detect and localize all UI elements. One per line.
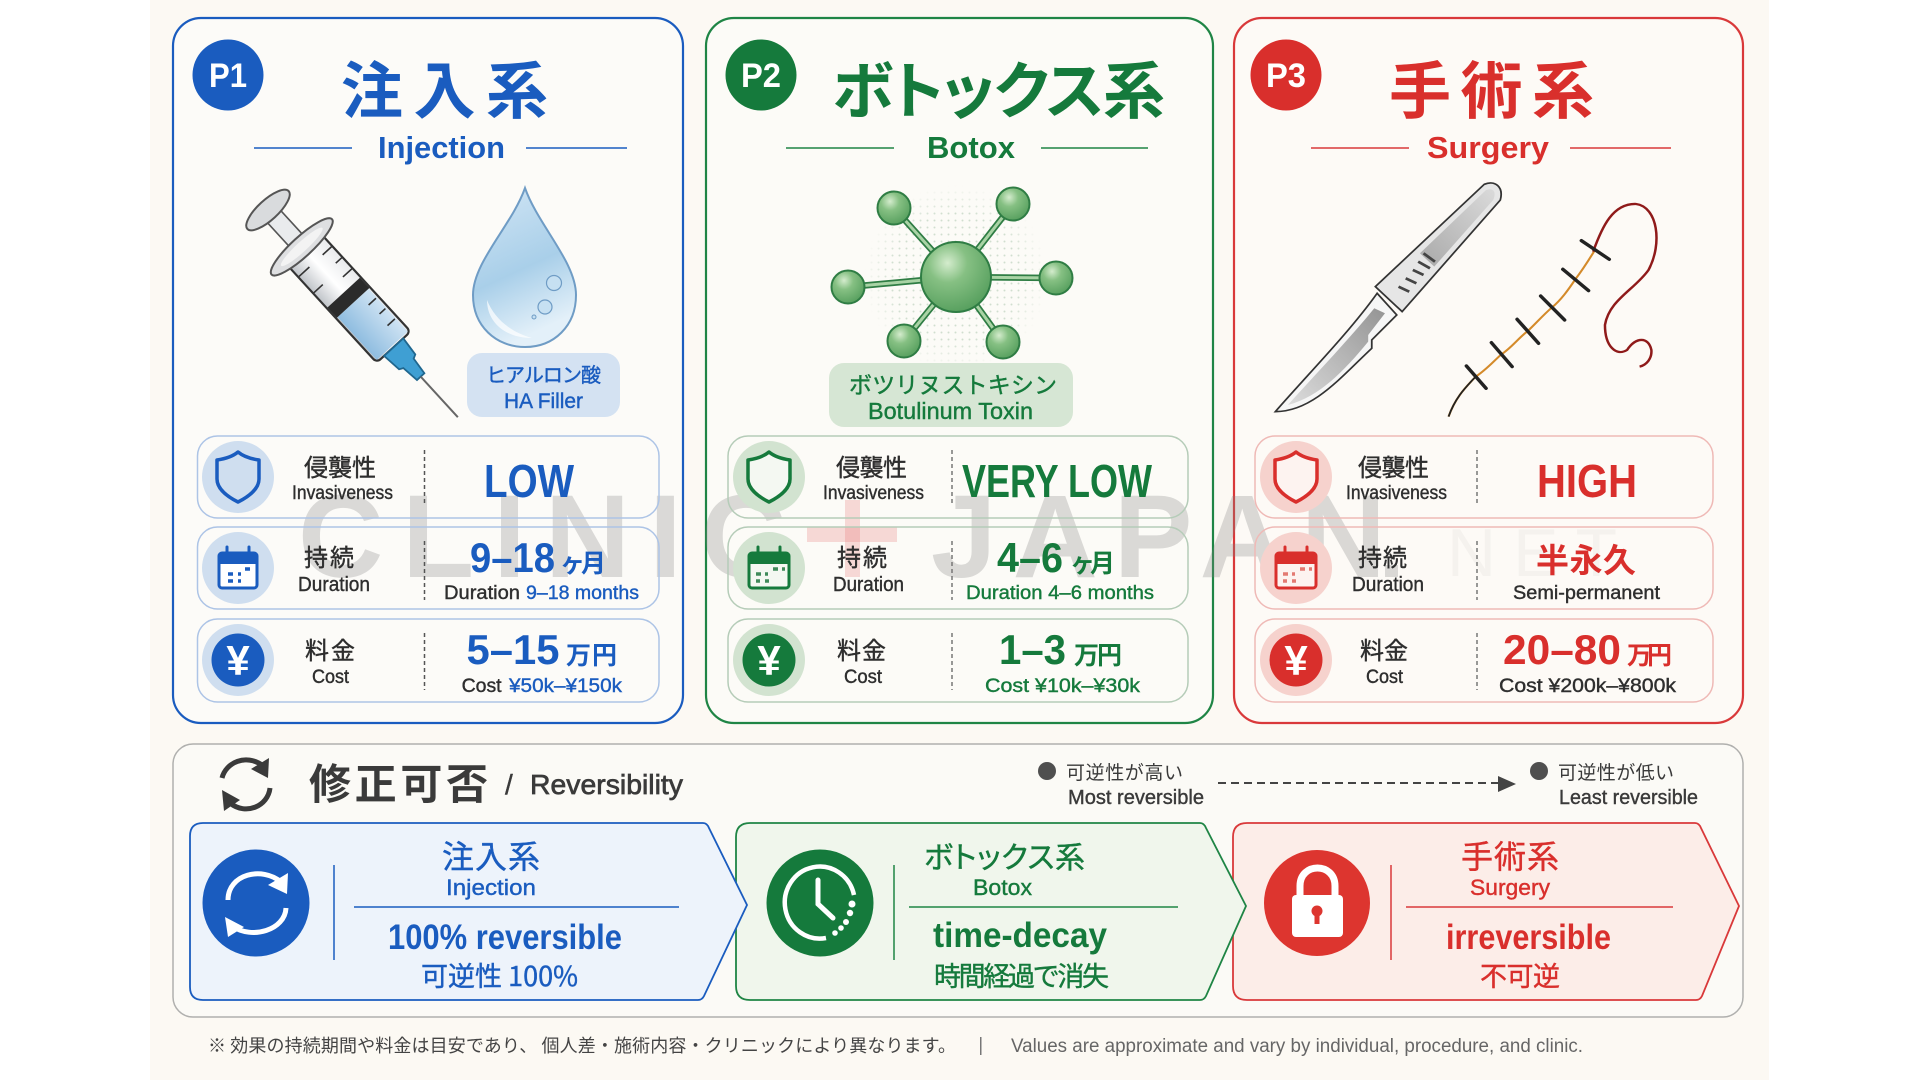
row: P3 duration: 半永久 bbox=[1536, 534, 1636, 582]
row: P2 cost: 1–3 bbox=[999, 626, 1066, 673]
row: P1 cost bbox=[198, 619, 659, 702]
chevron: surgery irreversible: 不可逆 bbox=[1480, 955, 1560, 994]
row: P3 cost: Cost bbox=[1366, 667, 1404, 688]
row: P1 duration: 持続 bbox=[304, 538, 354, 573]
row: P1 duration: 9–18 months bbox=[526, 583, 639, 604]
row: P3 cost: 20–80 bbox=[1503, 626, 1621, 673]
label: HA Filler: HA Filler bbox=[504, 390, 583, 413]
heading: 修正可否 / Reversibility: / bbox=[505, 769, 513, 800]
row: P1 cost: ¥50k–¥150k bbox=[508, 676, 623, 697]
chevron: surgery irreversible: Surgery bbox=[1470, 875, 1550, 900]
row: P1 invasiveness bbox=[198, 436, 659, 518]
chevron: injection reversible bbox=[190, 823, 747, 1000]
legend: least reversible: 可逆性が低い bbox=[1558, 758, 1674, 785]
row: P3 cost bbox=[1255, 619, 1713, 702]
chevron: botox time-decay: Botox bbox=[973, 875, 1032, 900]
watermark: CLINIC bbox=[298, 471, 786, 603]
row: P2 cost bbox=[728, 619, 1188, 702]
label: HA Filler: ヒアルロン酸 bbox=[486, 359, 601, 388]
row: P2 invasiveness: VERY LOW bbox=[962, 455, 1152, 507]
row: P1 cost: Cost bbox=[462, 676, 502, 697]
row: P3 cost: 万円 bbox=[1627, 636, 1672, 672]
row: P3 cost: 料金 bbox=[1360, 631, 1408, 666]
row: P2 cost: Cost ¥10k–¥30k bbox=[985, 676, 1141, 697]
icon: reversibility cycle bbox=[222, 758, 270, 811]
subheading: Botox: Botox bbox=[927, 130, 1016, 165]
icon: suture bbox=[1449, 204, 1656, 417]
row: P2 duration: Duration 4–6 months bbox=[966, 583, 1154, 604]
row: P1 invasiveness: LOW bbox=[484, 455, 574, 507]
row: P1 duration: Duration bbox=[444, 583, 520, 604]
label: Botulinum Toxin: Botulinum Toxin bbox=[868, 398, 1033, 424]
row: P1 cost: Cost bbox=[312, 667, 350, 688]
row: P2 cost: Cost bbox=[844, 667, 883, 688]
chevron: surgery irreversible: irreversible bbox=[1446, 918, 1611, 957]
row: P1 cost: 5–15 bbox=[466, 626, 560, 673]
panel: P2 botox frame bbox=[706, 18, 1213, 723]
row: P2 cost: 万円 bbox=[1074, 636, 1122, 672]
row: P1 duration: 9–18 bbox=[470, 534, 555, 581]
badge: P1: P1 bbox=[209, 57, 247, 95]
chevron: injection reversible: 可逆性 100% bbox=[421, 955, 578, 994]
panel: P3 surgery frame bbox=[1234, 18, 1743, 723]
badge: P3 bbox=[1250, 40, 1322, 110]
chevron: injection reversible: Injection bbox=[446, 875, 536, 900]
icon: botulinum molecule bbox=[832, 185, 1072, 369]
watermark: JAPAN bbox=[931, 471, 1386, 603]
row: P3 duration bbox=[1255, 527, 1713, 609]
row: P3 duration: Semi-permanent bbox=[1513, 583, 1661, 604]
footnote: separator bbox=[980, 1037, 982, 1055]
row: P3 duration: 持続 bbox=[1358, 538, 1407, 573]
row: P1 invasiveness: 侵襲性 bbox=[304, 448, 376, 483]
row: P3 duration: Duration bbox=[1352, 574, 1424, 596]
chevron: botox time-decay bbox=[736, 823, 1246, 1000]
heading: 手術系: 手術系 bbox=[1389, 41, 1594, 131]
row: P1 invasiveness: Invasiveness bbox=[292, 483, 393, 504]
row: P2 cost: ¥ bbox=[757, 637, 781, 684]
legend: most reversible bbox=[1038, 758, 1204, 809]
heading: ボトックス系: ボトックス系 bbox=[832, 41, 1165, 131]
P2 rows bbox=[728, 436, 1188, 702]
row: P2 duration: ヶ月 bbox=[1070, 544, 1115, 580]
row: P3 invasiveness: Invasiveness bbox=[1346, 483, 1447, 504]
label: Botulinum Toxin bbox=[829, 363, 1073, 427]
row: P2 duration: 4–6 bbox=[997, 534, 1063, 581]
row: P3 invasiveness bbox=[1255, 436, 1713, 518]
row: P3 cost: Cost ¥200k–¥800k bbox=[1499, 676, 1677, 697]
row: P2 invasiveness: 侵襲性 bbox=[836, 448, 907, 483]
row: P2 duration bbox=[728, 527, 1188, 609]
chevron: surgery irreversible bbox=[1233, 823, 1739, 1000]
chevron: injection reversible: 100% reversible bbox=[388, 918, 622, 957]
badge: P2: P2 bbox=[741, 57, 781, 95]
badge: P3: P3 bbox=[1266, 57, 1306, 95]
heading: 修正可否 / Reversibility: 修正可否 bbox=[309, 751, 488, 812]
row: P1 cost: 万円 bbox=[566, 636, 617, 672]
panel: reversibility frame bbox=[173, 744, 1743, 1017]
icon: water drop bbox=[473, 188, 576, 347]
label: Botulinum Toxin: ボツリヌストキシン bbox=[849, 366, 1057, 400]
watermark bbox=[298, 471, 1617, 603]
arrow: reversibility direction bbox=[1218, 776, 1516, 792]
chevron: botox time-decay: time-decay bbox=[933, 916, 1107, 955]
heading: 修正可否 / Reversibility: Reversibility bbox=[530, 769, 683, 800]
row: P2 invasiveness: Invasiveness bbox=[823, 483, 924, 504]
badge: P2 bbox=[726, 40, 796, 110]
panel: P1 injection frame bbox=[173, 18, 683, 723]
subheading: Injection: Injection bbox=[378, 130, 505, 165]
icon: scalpel bbox=[1275, 183, 1501, 412]
heading: 修正可否 / Reversibility bbox=[309, 751, 683, 812]
P1 rows bbox=[198, 436, 659, 702]
row: P1 cost: 料金 bbox=[305, 631, 355, 666]
row: P2 duration: 持続 bbox=[837, 538, 887, 573]
row: P3 cost: ¥ bbox=[1284, 637, 1308, 684]
row: P3 invasiveness: HIGH bbox=[1537, 455, 1637, 507]
icon: syringe bbox=[231, 175, 488, 445]
legend: least reversible bbox=[1530, 758, 1698, 809]
row: P1 cost: ¥ bbox=[226, 637, 250, 684]
row: P2 cost: 料金 bbox=[837, 631, 886, 666]
row: P1 duration: Duration bbox=[298, 574, 370, 596]
row: P2 duration: Duration bbox=[833, 574, 904, 596]
P3 rows bbox=[1255, 436, 1713, 702]
chevron: surgery irreversible: 手術系 bbox=[1461, 832, 1559, 878]
chevron: botox time-decay: 時間経過で消失 bbox=[934, 955, 1109, 994]
row: P3 invasiveness: 侵襲性 bbox=[1358, 448, 1429, 483]
chevron: botox time-decay: ボトックス系 bbox=[924, 833, 1085, 877]
legend: most reversible: Most reversible bbox=[1068, 787, 1204, 809]
row: P1 duration bbox=[198, 527, 659, 609]
legend: least reversible: Least reversible bbox=[1559, 787, 1698, 809]
heading: 注入系: 注入系 bbox=[341, 41, 548, 131]
subheading: Surgery: Surgery bbox=[1427, 130, 1550, 165]
footnote: Japanese: ※ 効果の持続期間や料金は目安であり、 個人差・施術内容・クリニックにより異なります。 bbox=[208, 1032, 956, 1058]
watermark: NET bbox=[1447, 515, 1617, 591]
legend: most reversible: 可逆性が高い bbox=[1066, 758, 1183, 785]
chevron: injection reversible: 注入系 bbox=[442, 832, 540, 878]
footnote: English: Values are approximate and vary by individual, procedure, and clinic. bbox=[1011, 1036, 1583, 1057]
row: P1 duration: ヶ月 bbox=[560, 544, 606, 580]
label: HA Filler bbox=[467, 353, 620, 417]
badge: P1 bbox=[192, 40, 264, 110]
row: P2 invasiveness bbox=[728, 436, 1188, 518]
